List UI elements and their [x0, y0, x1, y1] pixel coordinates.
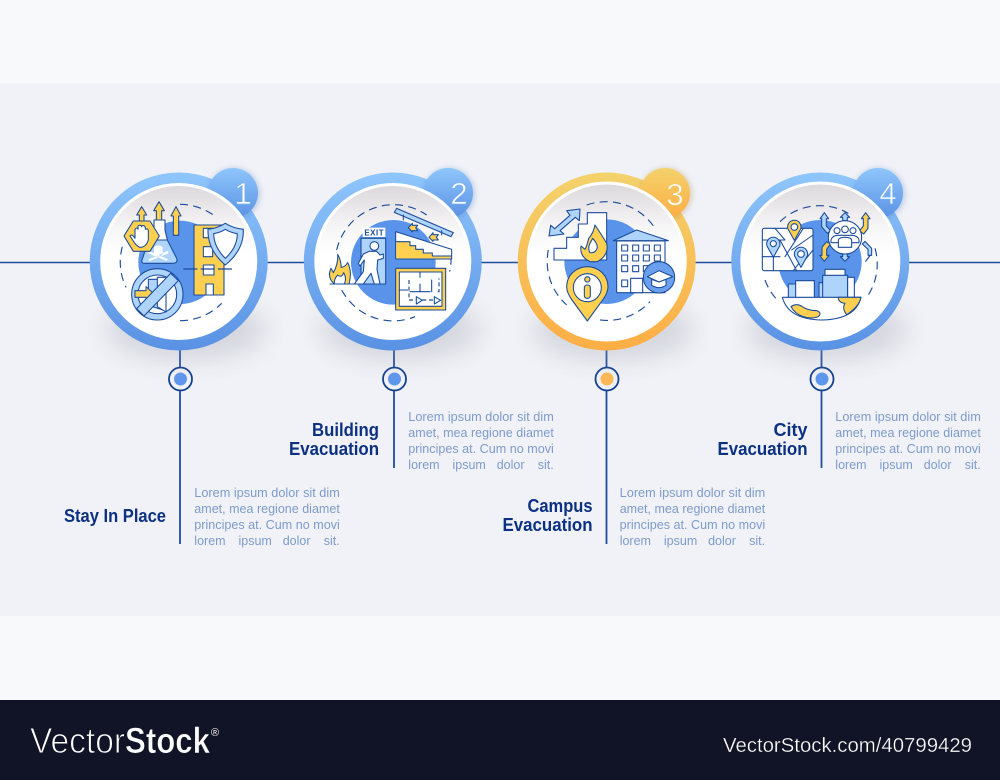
- description 2: ipsum: [452, 458, 486, 472]
- description 1: principes at. Cum no movi: [194, 518, 340, 532]
- description 1: lorem: [194, 534, 226, 548]
- description 1: dolor: [283, 534, 310, 548]
- description 1: sit.: [324, 534, 340, 548]
- circle badge 2: 2: [450, 176, 468, 211]
- footer bar: [0, 700, 1000, 780]
- footer logo: ®: [211, 727, 219, 739]
- description 2: amet, mea regione diamet: [408, 426, 554, 440]
- description 3: sit.: [749, 534, 765, 548]
- description 3: lorem: [620, 534, 651, 548]
- icon: city evacuation: [762, 206, 877, 320]
- step 1: stay in place: [64, 168, 340, 548]
- description 4: [835, 410, 981, 472]
- description 3: principes at. Cum no movi: [620, 518, 765, 532]
- heading: stay in place: Stay In Place: [64, 506, 166, 526]
- circle badge 4: [731, 168, 909, 360]
- description 1: Lorem ipsum dolor sit dim: [194, 486, 340, 500]
- icon: stay in place: [120, 202, 243, 321]
- heading: building evacuation: Evacuation: [289, 439, 379, 459]
- footer logo: Vector: [30, 720, 125, 761]
- circle badge 3: 3: [666, 177, 684, 212]
- description 4: amet, mea regione diamet: [835, 426, 981, 440]
- step 3: campus evacuation: [502, 168, 766, 548]
- description 2: Lorem ipsum dolor sit dim: [408, 410, 554, 424]
- heading: campus evacuation: Evacuation: [502, 515, 592, 535]
- description 2: lorem: [408, 458, 440, 472]
- description 4: principes at. Cum no movi: [835, 442, 981, 456]
- heading: city evacuation: Evacuation: [718, 439, 808, 459]
- description 1: ipsum: [238, 534, 272, 548]
- stem and marker 4: [810, 345, 834, 468]
- circle badge 3: [518, 168, 696, 360]
- description 4: ipsum: [880, 458, 913, 472]
- timeline line: [0, 262, 1000, 264]
- stem and marker 2: [383, 345, 406, 468]
- description 4: sit.: [965, 458, 981, 472]
- description 4: dolor: [924, 458, 951, 472]
- heading: campus evacuation: [502, 496, 592, 535]
- heading: city evacuation: [718, 420, 808, 459]
- footer logo: [30, 720, 219, 761]
- heading: city evacuation: City: [774, 420, 808, 440]
- heading: campus evacuation: Campus: [528, 496, 592, 516]
- circle badge 1: 1: [234, 176, 252, 211]
- description 4: Lorem ipsum dolor sit dim: [835, 410, 981, 424]
- step 2: building evacuation: [289, 168, 554, 472]
- stem and marker 3: [596, 345, 618, 544]
- description 2: principes at. Cum no movi: [408, 442, 554, 456]
- description 3: [620, 486, 766, 548]
- description 3: Lorem ipsum dolor sit dim: [620, 486, 765, 500]
- description 2: dolor: [497, 458, 524, 472]
- icon: campus evacuation: [547, 202, 675, 321]
- circle badge 2: [304, 168, 482, 360]
- circle badge 1: [90, 168, 268, 360]
- description 1: [194, 486, 340, 548]
- stem and marker 1: [169, 345, 192, 544]
- description 3: ipsum: [664, 534, 697, 548]
- icon: building evacuation: [329, 205, 453, 321]
- description 4: lorem: [835, 458, 867, 472]
- description 1: amet, mea regione diamet: [194, 502, 340, 516]
- circle badge 4: 4: [879, 176, 897, 211]
- step 4: city evacuation: [718, 168, 981, 472]
- description 3: dolor: [708, 534, 736, 548]
- background panel: [0, 83, 1000, 616]
- icon: building evacuation: EXIT: [364, 228, 384, 237]
- description 2: [408, 410, 554, 472]
- description 3: amet, mea regione diamet: [620, 502, 766, 516]
- footer image id: VectorStock.com/40799429: [723, 735, 972, 757]
- description 2: sit.: [538, 458, 554, 472]
- footer logo: Stock: [125, 720, 211, 761]
- heading: building evacuation: [289, 420, 379, 459]
- heading: building evacuation: Building: [312, 420, 379, 440]
